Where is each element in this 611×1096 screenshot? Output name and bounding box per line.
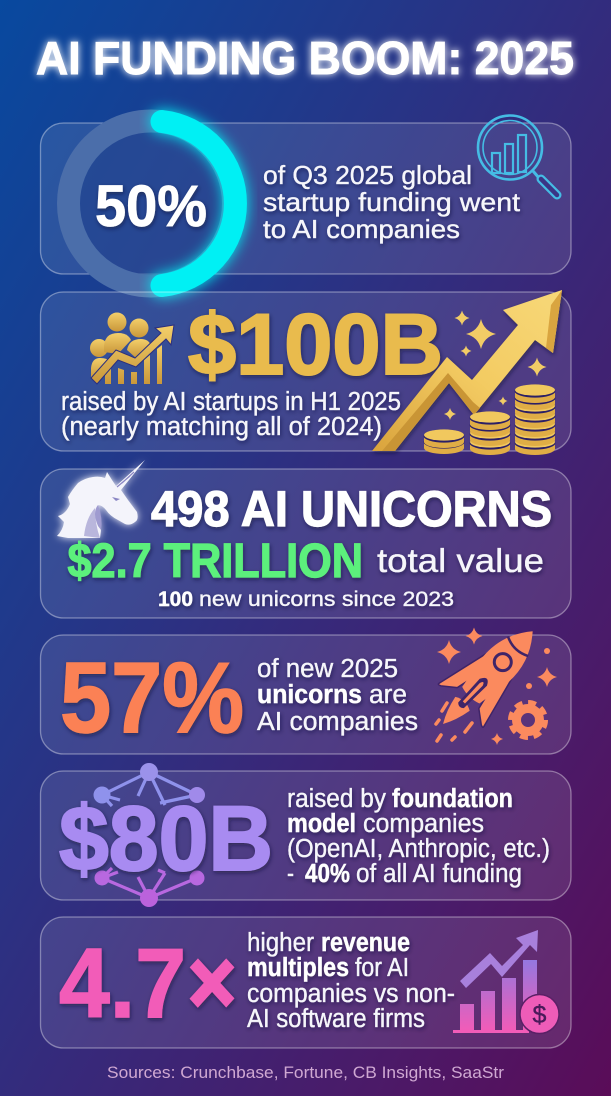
new unicorns note: 100 bbox=[158, 588, 193, 611]
card background bbox=[40, 917, 571, 1048]
description: 40% bbox=[305, 860, 350, 888]
icon: rising gold arrow bbox=[372, 290, 562, 451]
description: raised by AI startups in H1 2025 bbox=[61, 388, 401, 416]
icon: growth chart with dollar coin: $ bbox=[533, 1001, 547, 1029]
icon: coin stacks bbox=[424, 384, 556, 455]
icon: rocket and gear bbox=[421, 610, 557, 746]
valuation: $2.7 TRILLION bbox=[68, 535, 363, 588]
donut chart bbox=[68, 121, 235, 286]
description: for AI bbox=[355, 954, 409, 982]
icon: magnifier with chart bbox=[478, 116, 557, 195]
card background bbox=[40, 292, 571, 451]
big number: × bbox=[188, 933, 236, 1033]
description: companies bbox=[363, 810, 484, 838]
icon: sparkles bbox=[444, 310, 546, 420]
big number: $80B bbox=[59, 788, 273, 890]
description bbox=[287, 785, 550, 888]
valuation label: total value bbox=[377, 542, 544, 579]
description: raised by bbox=[287, 785, 386, 813]
description: model bbox=[287, 810, 356, 838]
panel: 80B foundation models bbox=[40, 763, 571, 907]
description: multiples bbox=[247, 954, 349, 982]
description: to AI companies bbox=[263, 214, 460, 244]
donut value: 50% bbox=[95, 174, 207, 239]
big number: 4.7 bbox=[59, 928, 186, 1038]
description: (OpenAI, Anthropic, etc.) bbox=[287, 835, 550, 863]
description: foundation bbox=[392, 785, 513, 813]
description: higher bbox=[247, 929, 314, 957]
panel: 100B raised bbox=[40, 290, 571, 455]
card background bbox=[40, 635, 571, 754]
icon: people and growth chart bbox=[90, 312, 174, 384]
description bbox=[247, 929, 455, 1033]
description: companies vs non- bbox=[247, 980, 455, 1008]
card background bbox=[40, 469, 571, 618]
description bbox=[61, 388, 401, 441]
description: of Q3 2025 global bbox=[263, 160, 472, 190]
icon: growth chart with dollar coin bbox=[453, 930, 559, 1034]
title: AI FUNDING BOOM: 2025 bbox=[36, 32, 574, 84]
description bbox=[263, 160, 521, 244]
panel: AI unicorns bbox=[40, 460, 571, 618]
new unicorns note: new unicorns since 2023 bbox=[199, 588, 454, 611]
big number: $100B bbox=[188, 297, 443, 393]
description: AI companies bbox=[257, 708, 418, 736]
description bbox=[257, 655, 418, 736]
description: of new 2025 bbox=[257, 655, 398, 683]
description: revenue bbox=[321, 929, 410, 957]
card background bbox=[40, 123, 571, 274]
big number: 57% bbox=[60, 642, 244, 754]
card background bbox=[40, 771, 571, 900]
icon: network graph bbox=[94, 763, 205, 907]
panel: revenue multiples bbox=[40, 917, 571, 1048]
description: (nearly matching all of 2024) bbox=[61, 413, 382, 441]
icon: unicorn bbox=[57, 460, 145, 538]
description: startup funding went bbox=[263, 187, 521, 217]
description: are bbox=[369, 681, 407, 709]
description: unicorns bbox=[257, 681, 362, 709]
description: - bbox=[287, 860, 294, 888]
headline: 498 AI UNICORNS bbox=[151, 481, 552, 537]
panel: 57 percent bbox=[40, 610, 571, 754]
description: AI software firms bbox=[247, 1005, 425, 1033]
description: of all AI funding bbox=[356, 860, 522, 888]
sources footer: Sources: Crunchbase, Fortune, CB Insights, SaaStr bbox=[107, 1063, 504, 1082]
panel: 50 percent of funding bbox=[40, 116, 571, 286]
